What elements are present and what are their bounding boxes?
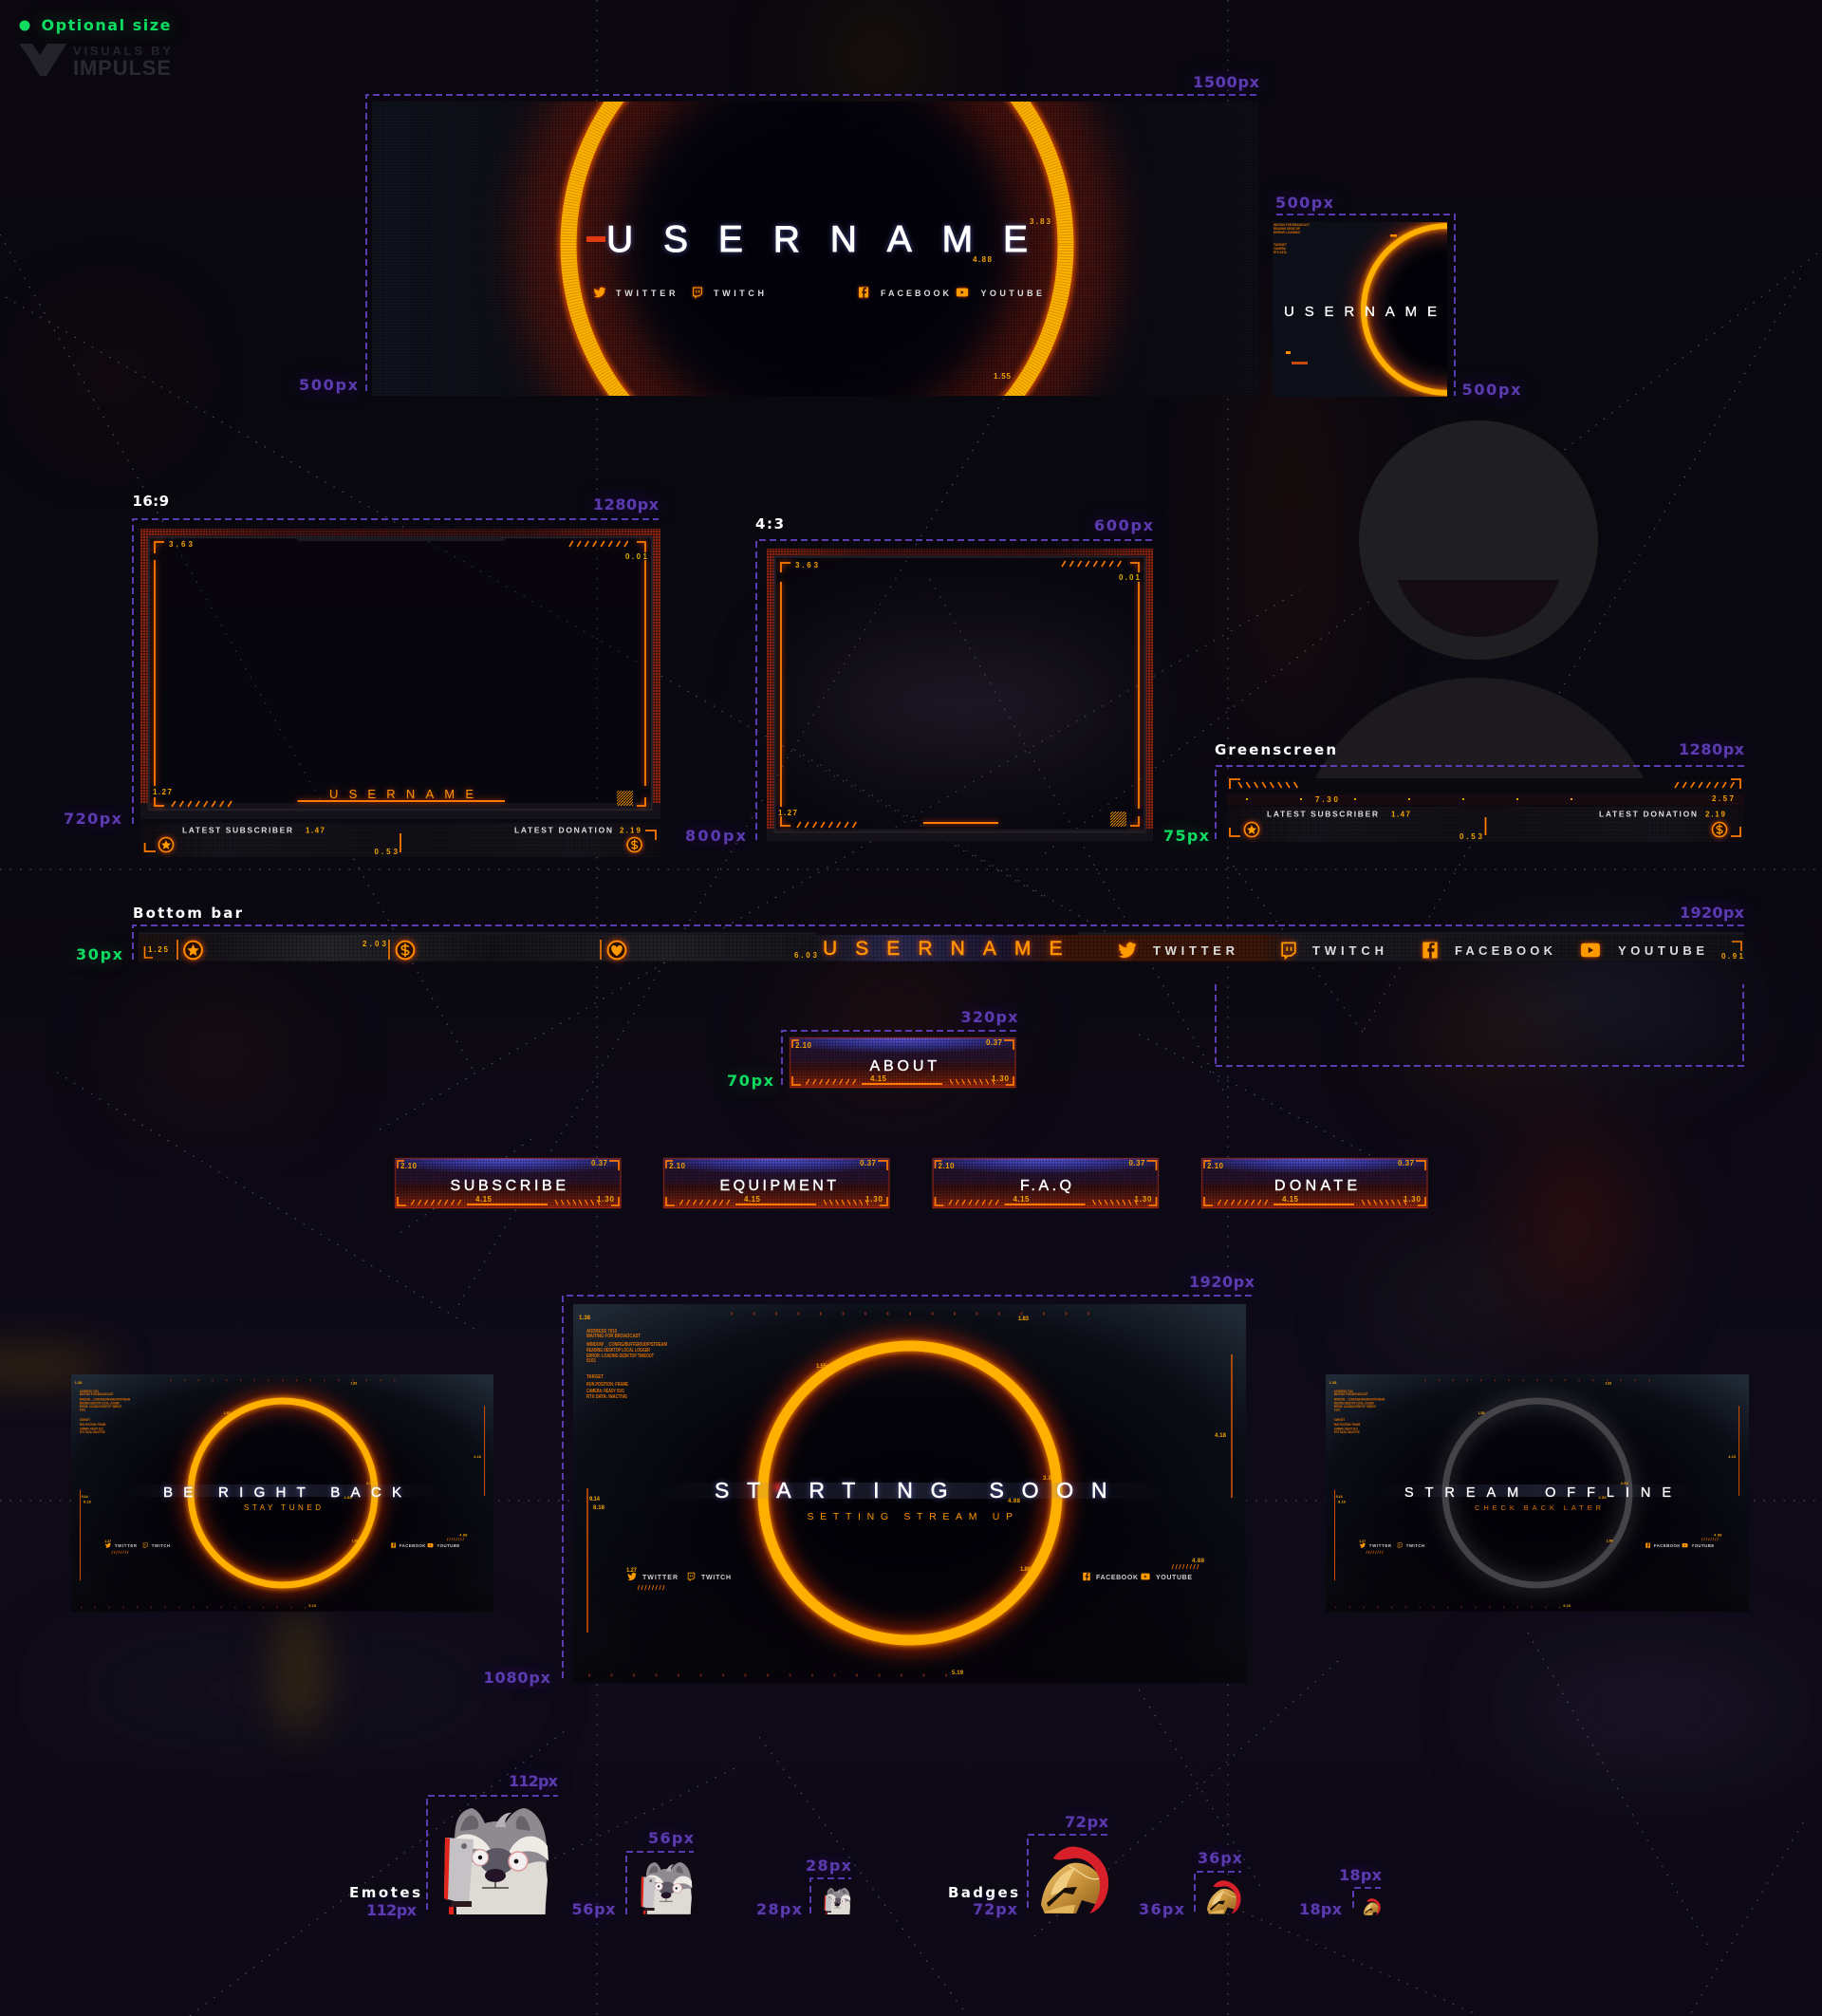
panel: greenscreen overlay: 2.19 [1705,811,1726,818]
profile small readouts [1274,223,1311,254]
panel button: Donate [1201,1158,1427,1208]
panel: bottom bar: 6.03 [794,951,818,960]
bottom bar social links: TWITTER [1153,943,1236,958]
emote 56 [626,1852,694,1914]
panel: 16:9 webcam frame: 1.27 [153,788,173,796]
label: profile height: 500px [1461,381,1521,399]
bottom bar social links [1119,942,1704,959]
orange ring [763,1346,1057,1640]
heading: 4:3: 4:3 [755,515,784,532]
lower third: 16:9 latest events bar: 1.47 [306,826,325,835]
panel: bottom bar [76,904,1745,963]
profile username: USERNAME [1284,304,1437,320]
panel: 16:9 webcam frame: 3.63 [169,540,194,549]
badge 18 [1353,1888,1381,1915]
panel: 16:9 webcam frame [64,493,660,828]
panel: be right back scene [71,1374,493,1612]
frame username: USERNAME [329,787,474,801]
offline subtitle: CHECK BACK LATER [1475,1503,1602,1512]
emotes group [349,1772,852,1919]
lower third: 16:9 latest events bar: LATEST DONATION [514,826,612,835]
panel: starting soon scene [484,1273,1255,1687]
profile small readouts: WAITING FOR BROADCAST [1274,223,1311,227]
badge 36 [1195,1872,1241,1913]
heading: Badges: Badges [948,1884,1018,1901]
label: 28px height: 28px [756,1900,803,1918]
bottom bar social links: YOUTUBE [1618,943,1704,958]
logo: Visuals by Impulse: IMPULSE [73,56,171,80]
panel button: About [727,1008,1018,1090]
label: button width: 320px [960,1008,1018,1026]
BRB subtitle: STAY TUNED [244,1503,321,1512]
banner social links: TWITCH [714,289,764,298]
panel: 4:3 webcam frame: 1.27 [778,809,798,817]
label: webcam height: 720px [64,810,122,828]
banner small numbers: 3.83 [1030,217,1051,226]
panel: 4:3 webcam frame: 0.01 [1119,573,1141,582]
panel: profile picture 500x500 [1273,214,1456,397]
panel: 4:3 webcam frame: 3.63 [795,561,819,569]
panel button: Donate: DONATE [1274,1178,1357,1194]
panel: greenscreen overlay: LATEST DONATION [1599,809,1697,818]
label: 75px: 75px [1163,827,1210,845]
badges group [948,1813,1383,1918]
heading: Bottom bar: Bottom bar [133,905,243,922]
label: 4:3 width: 600px [1094,516,1154,534]
panel: bottom bar: 1.25 [148,945,169,954]
profile small readouts: ERROR LOADING [1274,231,1300,234]
label: 18px width: 18px [1339,1866,1383,1884]
panel: greenscreen overlay: 2.57 [1712,794,1735,803]
panel: greenscreen overlay: 1.47 [1391,811,1411,818]
scene title: STARTING SOON [715,1478,1106,1503]
panel button: Subscribe: SUBSCRIBE [450,1178,566,1194]
heading: Emotes: Emotes [349,1884,420,1901]
panel button: About: ABOUT [869,1058,937,1074]
lower third: 16:9 latest events bar: 2.19 [620,826,641,835]
label: 4:3 height: 800px [685,827,747,845]
scene subtitle: SETTING STREAM UP [807,1511,1013,1522]
panel: bottom bar: 2.03 [363,940,387,948]
banner username: USERNAME [606,219,1028,260]
emote 28 [810,1878,851,1914]
panel button: Equipment [663,1158,890,1208]
label: banner height: 500px [299,376,359,394]
banner small numbers: 4.88 [973,255,993,264]
label: bottom bar height: 30px [76,945,123,963]
BRB title: BE RIGHT BACK [163,1484,401,1501]
lower third: 16:9 latest events bar: LATEST SUBSCRIBER [182,826,292,835]
label: 56px width: 56px [648,1829,695,1847]
profile small readouts: READING DESKTOP [1274,227,1301,231]
panel: stream offline scene [1326,1374,1749,1612]
label: 36px width: 36px [1198,1849,1243,1867]
logo: Visuals by Impulse [19,44,171,80]
panel: greenscreen overlay: 0.53 [1459,832,1483,841]
label: bottom bar width: 1920px [1680,904,1745,922]
label: 72px width: 72px [1065,1813,1109,1831]
lower third: 16:9 latest events bar [140,823,660,857]
banner social links: TWITTER [616,289,676,298]
label: 18px height: 18px [1299,1900,1343,1918]
label: scene height: 1080px [484,1669,551,1687]
label: profile width: 500px [1275,194,1334,212]
emote 112 [427,1796,558,1914]
label: 112px width: 112px [509,1772,559,1790]
bottom bar social links: FACEBOOK [1455,943,1553,958]
label: button height: 70px [727,1072,774,1090]
banner social links [594,287,1042,298]
bottom bar social links: TWITCH [1312,943,1384,958]
4:3 brackets [781,563,1139,826]
panel: 16:9 webcam frame: 0.01 [625,552,648,561]
frame brackets [155,542,645,806]
label: greenscreen width: 1280px [1679,740,1745,758]
panel: greenscreen overlay: LATEST SUBSCRIBER [1267,809,1378,818]
label: 36px height: 36px [1139,1900,1185,1918]
panel: 4:3 webcam frame [685,515,1154,845]
bottom bar username: USERNAME [823,938,1063,960]
banner social links: FACEBOOK [881,289,949,298]
label: banner width: 1500px [1193,73,1260,91]
badge 72 [1028,1835,1108,1913]
logo: Visuals by Impulse: VISUALS BY [73,44,171,58]
label: webcam width: 1280px [593,495,660,513]
panel: greenscreen overlay: 7.30 [1315,795,1339,804]
label: 112px height: 112px [366,1901,418,1919]
profile small readouts: CAMERA [1274,247,1286,251]
panel button: F.A.Q [932,1158,1159,1208]
panel button: Equipment: EQUIPMENT [719,1178,836,1194]
label: 56px height: 56px [571,1900,616,1918]
panel button: Subscribe [395,1158,621,1208]
heading: Greenscreen: Greenscreen [1215,741,1336,758]
heading: 16:9: 16:9 [133,493,169,510]
icon: offline user silhouette [1315,420,1644,778]
banner social links: YOUTUBE [981,289,1042,298]
legend: optional size: Optional size [42,16,171,34]
banner small numbers: 1.55 [994,372,1012,381]
lower third: 16:9 latest events bar: 0.53 [374,848,399,856]
panel: bottom bar: 0.91 [1721,952,1744,961]
offline title: STREAM OFFLINE [1404,1485,1671,1501]
panel: banner 1500x500 [365,94,1259,396]
profile small readouts: RTX DATA [1274,251,1287,254]
profile small readouts: TARGET [1274,243,1288,247]
panel: greenscreen overlay [1215,740,1745,1066]
label: 28px width: 28px [806,1857,852,1875]
banner small numbers [586,217,1051,381]
panel button: F.A.Q: F.A.Q [1020,1178,1071,1194]
label: 72px height: 72px [973,1900,1018,1918]
label: scene width: 1920px [1189,1273,1255,1291]
